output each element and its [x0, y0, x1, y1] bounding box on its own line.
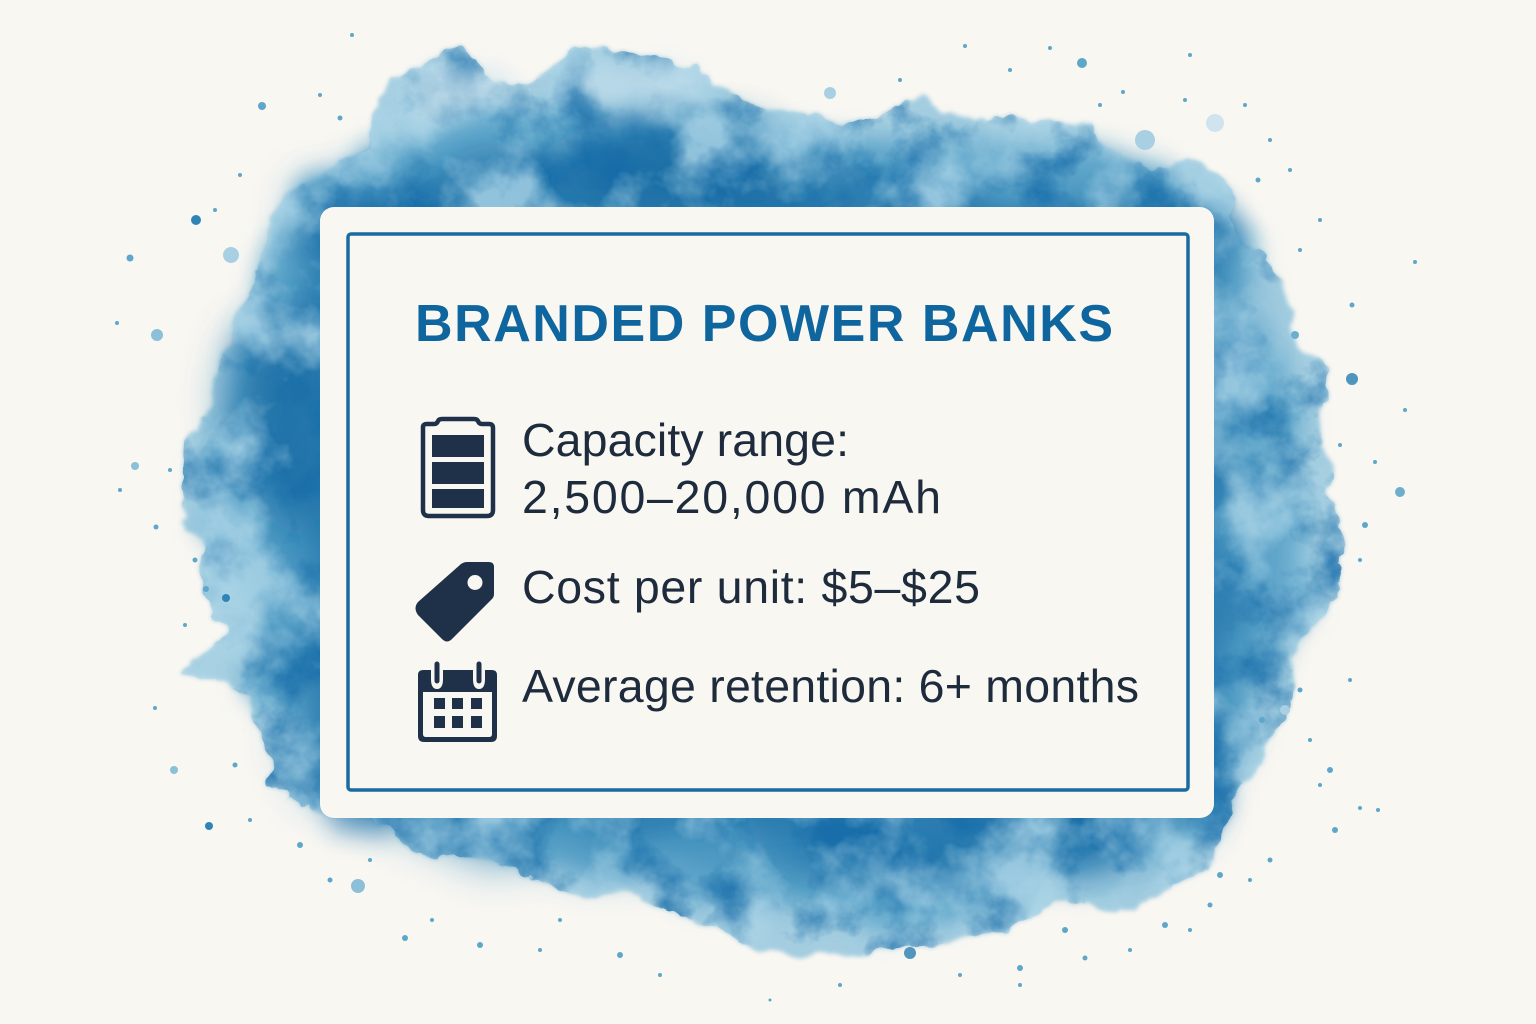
row: average retention	[418, 660, 1139, 742]
icon: calendar	[418, 664, 497, 742]
cost text: Cost per unit: $5–$25	[522, 561, 980, 613]
icon: battery	[423, 419, 493, 516]
row: cost per unit	[416, 561, 980, 642]
card inner border	[348, 234, 1188, 790]
card	[320, 207, 1214, 818]
title: BRANDED POWER BANKS	[415, 295, 1113, 353]
capacity text: 2,500–20,000 mAh	[522, 471, 941, 523]
watercolor splash	[180, 50, 1342, 965]
retention text: Average retention: 6+ months	[522, 660, 1139, 712]
row: capacity range	[423, 414, 941, 523]
capacity text: Capacity range:	[522, 414, 849, 466]
icon: price tag	[416, 562, 494, 642]
